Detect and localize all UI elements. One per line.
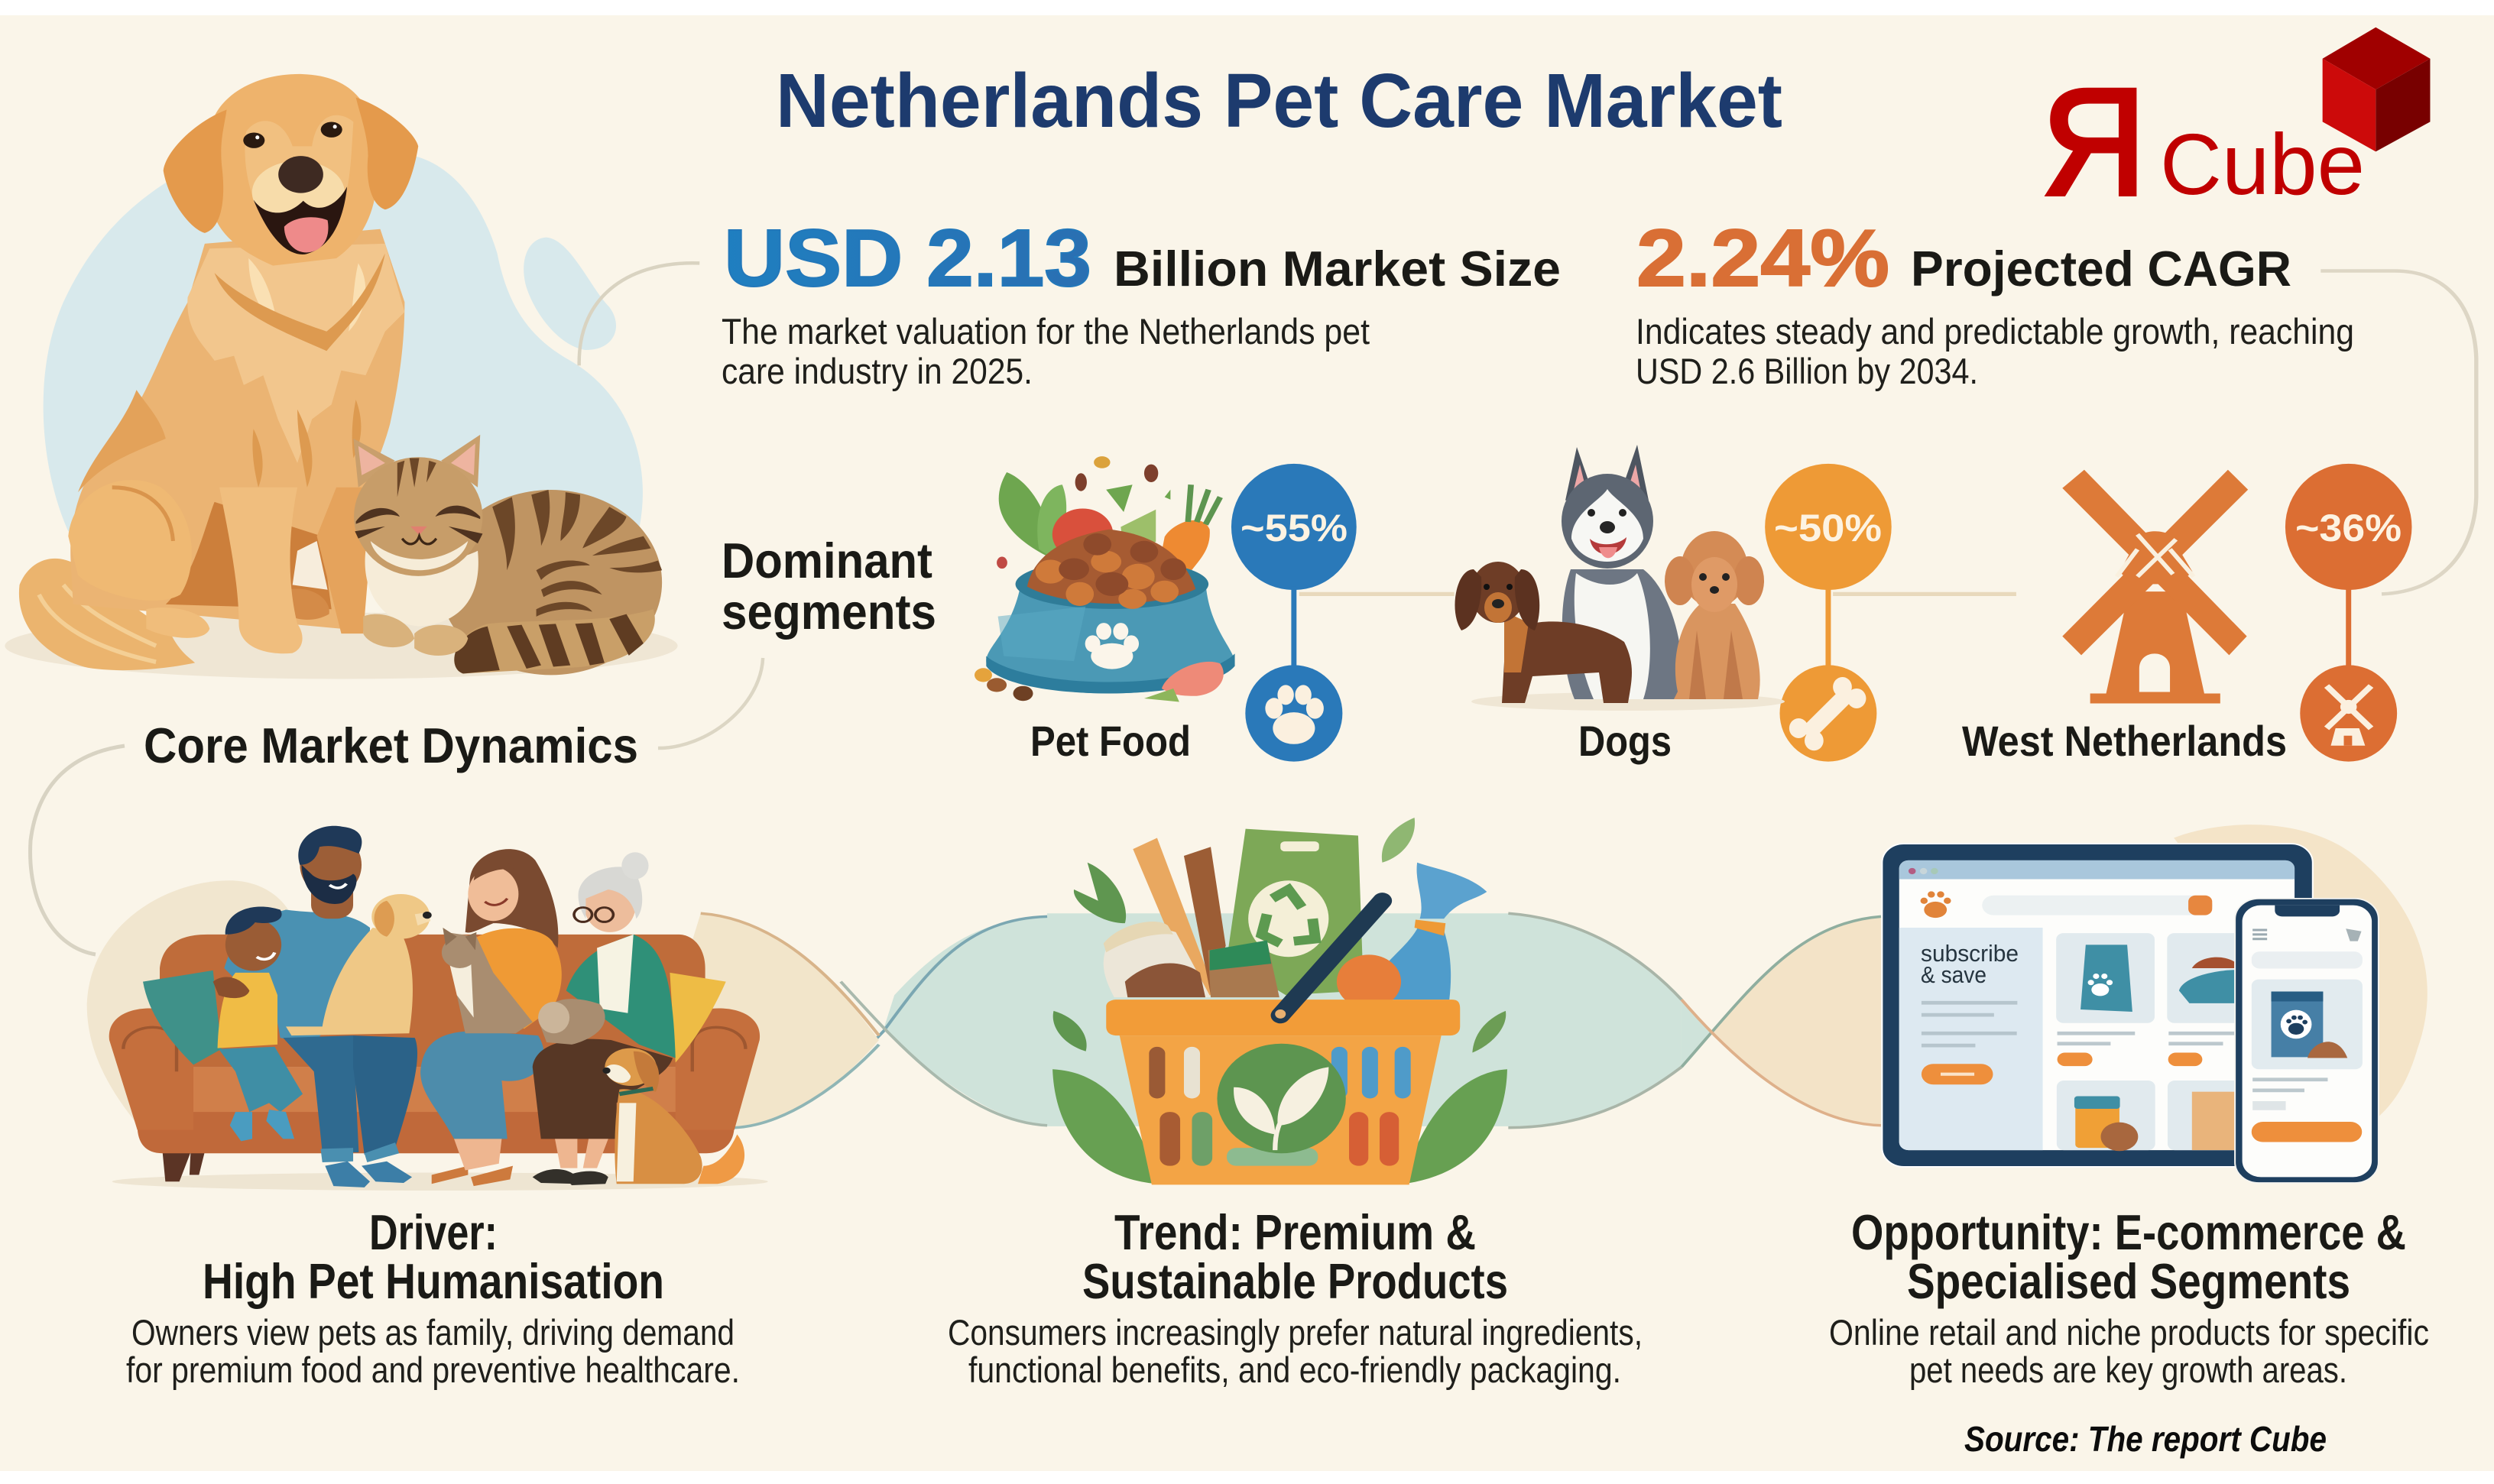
- badge: ~50%: [1765, 464, 1892, 669]
- text: driver: High Pet Humanisation: [203, 1253, 664, 1309]
- label: dogs: Dogs: [1578, 717, 1672, 765]
- logo: RCube: Cube: [2160, 116, 2365, 212]
- illustration: sustainable basket: [1052, 818, 1507, 1184]
- text: trend: functional benefits, and eco-friendly packaging.: [968, 1350, 1621, 1390]
- phone: [2235, 899, 2379, 1183]
- child: [213, 906, 303, 1141]
- stat: market size: Billion Market Size: [1114, 241, 1561, 296]
- text: driver: [126, 1204, 740, 1390]
- illustration: dog and cat: [5, 74, 763, 748]
- illustration: family on sofa: [87, 826, 879, 1191]
- tabby cat: [353, 435, 662, 675]
- small pack: [1208, 941, 1279, 997]
- heading: dominant segments: [722, 533, 936, 640]
- illustration: three dogs: [1455, 445, 1785, 711]
- text: opportunity: [1829, 1204, 2429, 1390]
- label: ~50%: ~50%: [1774, 507, 1882, 549]
- dachshund: [1455, 562, 1632, 703]
- connector: CAGR to west netherlands: [2320, 271, 2476, 594]
- source note: Source: The report Cube: [1964, 1419, 2327, 1459]
- title: Netherlands Pet Care Market: [776, 58, 1782, 144]
- blue blob: [44, 156, 643, 531]
- stat: market size: care industry in 2025.: [722, 351, 1033, 391]
- label: subscribe and save: & save: [1921, 961, 1986, 988]
- sofa: [109, 935, 760, 1181]
- icon: windmill badge: [2300, 665, 2397, 762]
- badge: ~36%: [2285, 464, 2411, 669]
- treat sticks: [1133, 838, 1216, 995]
- connector: core dynamics to driver: [31, 746, 125, 954]
- cats: [442, 928, 605, 1045]
- text: opportunity: Opportunity: E-commerce &: [1851, 1204, 2406, 1260]
- icon: paw badge: [1245, 665, 1342, 762]
- basket: [1106, 1000, 1460, 1184]
- woman: [420, 849, 562, 1186]
- stat: CAGR: 2.24%: [1636, 213, 1889, 303]
- stat: CAGR: USD 2.6 Billion by 2034.: [1636, 351, 1978, 391]
- stat: market size: [722, 213, 1561, 391]
- label: west netherlands: West Netherlands: [1962, 717, 2287, 765]
- grandma: [533, 852, 676, 1185]
- text: trend: Trend: Premium &: [1114, 1204, 1476, 1260]
- tablet: [1882, 844, 2313, 1167]
- floating leaves: [1382, 818, 1415, 863]
- herb leaf: [1074, 863, 1126, 923]
- large leaves: [1052, 1069, 1157, 1184]
- stat: CAGR: Projected CAGR: [1911, 241, 2291, 296]
- stat: market size: USD 2.13: [724, 213, 1091, 303]
- basket handle: [1280, 901, 1383, 1016]
- green pack: [1227, 829, 1364, 995]
- windmill large: [2062, 470, 2248, 703]
- label: pet food: Pet Food: [1030, 717, 1191, 765]
- connector: core dynamics to segments: [658, 658, 763, 748]
- stat: market size: The market valuation for the Netherlands pet: [722, 311, 1370, 352]
- husky: [1562, 445, 1682, 699]
- yellow dog: [286, 894, 432, 1035]
- sitting dog: [602, 1048, 744, 1184]
- beige blobs: [87, 880, 297, 1121]
- heading: dominant segments: segments: [722, 584, 936, 640]
- text: driver: for premium food and preventive healthcare.: [126, 1350, 740, 1390]
- icon: bone badge: [1779, 665, 1876, 762]
- stat: CAGR: Indicates steady and predictable growth, reaching: [1636, 311, 2354, 352]
- segment: dogs badges: [1765, 271, 2476, 762]
- segment: pet food: [975, 456, 1455, 762]
- illustration: tablet and phone: [1882, 844, 2379, 1183]
- text: driver: Driver:: [369, 1204, 498, 1260]
- connector line: [1833, 591, 2016, 597]
- label: ~55%: ~55%: [1241, 507, 1348, 549]
- icon: food bowl: [975, 456, 1235, 702]
- label: ~36%: ~36%: [2295, 507, 2402, 549]
- logo: RCube: [2042, 28, 2430, 226]
- text: opportunity: Specialised Segments: [1907, 1253, 2350, 1309]
- text: trend: Sustainable Products: [1082, 1253, 1508, 1309]
- stat: CAGR: [1636, 213, 2354, 391]
- heading: dominant segments: Dominant: [722, 533, 932, 588]
- pouch: [1369, 923, 1451, 1000]
- golden retriever: [19, 74, 418, 670]
- cookie: [1337, 954, 1401, 1009]
- wave band: connecting bottom panels: [841, 825, 2428, 1128]
- label: subscribe and save: subscribe: [1921, 940, 2019, 967]
- heading: core market dynamics: Core Market Dynamics: [144, 718, 638, 773]
- man: [224, 826, 417, 1188]
- badge: ~55%: [1231, 464, 1357, 669]
- poodle: [1665, 531, 1764, 699]
- logo: RCube: Я: [2042, 57, 2146, 226]
- jar: [1104, 922, 1211, 997]
- text: trend: Consumers increasingly prefer natural ingredients,: [948, 1312, 1643, 1353]
- text: driver: Owners view pets as family, driving demand: [131, 1312, 735, 1353]
- text: trend: [948, 1204, 1643, 1390]
- connector: dog to market size: [579, 263, 699, 365]
- connector line: [1299, 591, 1455, 597]
- text: opportunity: pet needs are key growth areas.: [1909, 1350, 2347, 1390]
- label: subscribe and save: [1921, 940, 2019, 988]
